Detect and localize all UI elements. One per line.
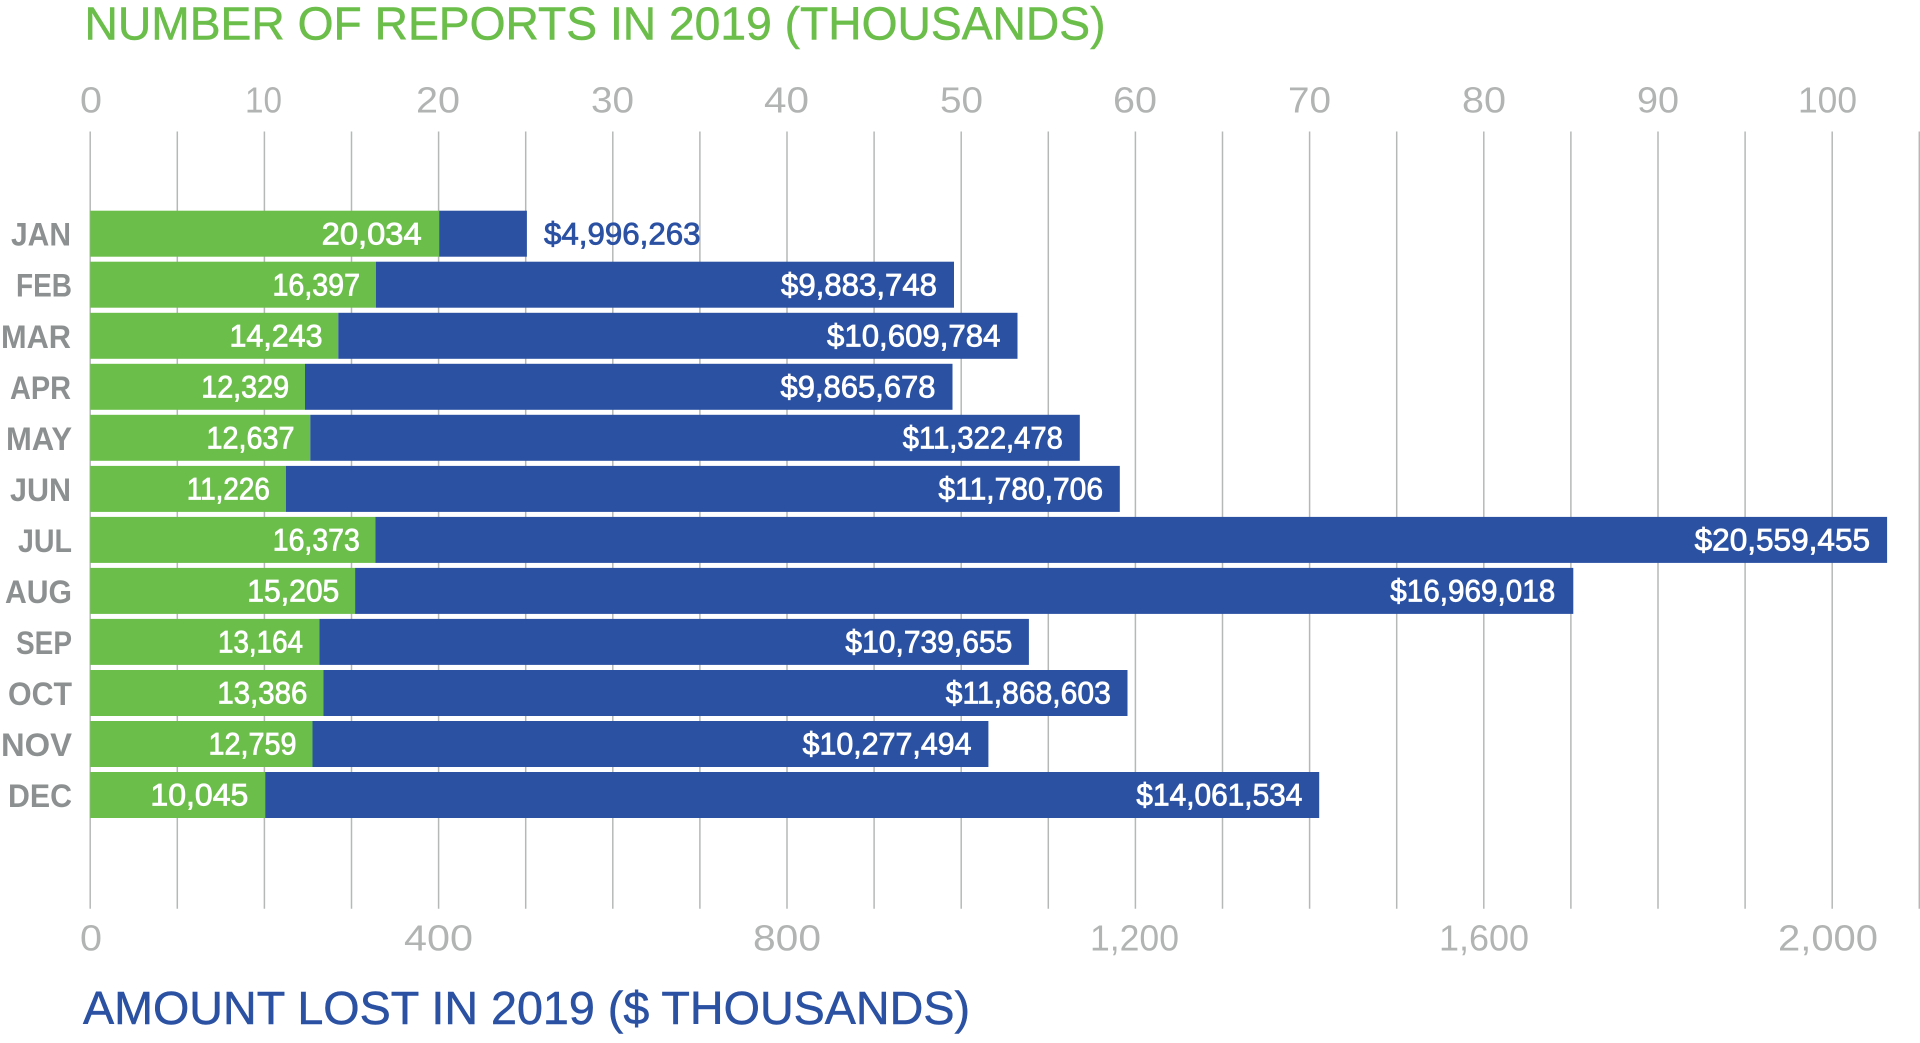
amount value: $20,559,455 (1695, 522, 1870, 558)
reports value: 16,397 (272, 266, 360, 302)
green bar (90, 364, 305, 410)
month label: SEP (16, 625, 72, 661)
row: September (16, 619, 1029, 665)
row: February (16, 262, 954, 308)
reports value: 12,637 (206, 419, 294, 455)
green bar (90, 211, 439, 257)
top axis labels: 40 (764, 80, 809, 121)
blue bar (355, 568, 1573, 614)
amount value: $9,865,678 (780, 368, 936, 404)
reports value: 11,226 (187, 470, 270, 506)
green bar (90, 517, 375, 563)
reports value: 13,386 (217, 675, 307, 711)
green bar (90, 670, 323, 716)
blue bar (320, 619, 1029, 665)
reports value: 12,329 (201, 368, 289, 404)
bottom axis labels (80, 918, 1878, 959)
month label: JAN (11, 217, 71, 253)
row: August (5, 568, 1573, 614)
amount value: $4,996,263 (544, 215, 700, 251)
blue bar (376, 262, 954, 308)
bottom axis labels: 1,600 (1439, 918, 1529, 959)
row: April (10, 364, 952, 410)
row: October (8, 670, 1128, 716)
row: March (1, 313, 1018, 359)
top axis labels: 90 (1637, 80, 1679, 121)
top axis labels: 30 (591, 80, 634, 121)
top axis labels: 60 (1113, 80, 1157, 121)
blue bar (323, 670, 1127, 716)
blue bar (286, 466, 1120, 512)
reports value: 14,243 (230, 317, 322, 353)
blue bar (305, 364, 952, 410)
blue bar (312, 721, 988, 767)
blue bar (439, 211, 527, 257)
blue bar (375, 517, 1887, 563)
amount value: $14,061,534 (1136, 777, 1302, 813)
month label: FEB (16, 268, 72, 304)
row: May (6, 415, 1080, 461)
row: June (10, 466, 1120, 512)
bottom axis labels: 0 (80, 918, 102, 959)
amount value: $11,868,603 (946, 675, 1111, 711)
bottom axis labels: 2,000 (1778, 918, 1878, 959)
amount value: $11,322,478 (903, 419, 1063, 455)
green bar (90, 619, 320, 665)
row: November (1, 721, 988, 767)
green bar (90, 721, 312, 767)
green bar (90, 568, 355, 614)
reports value: 12,759 (208, 726, 296, 762)
top axis labels: 70 (1288, 80, 1331, 121)
green bar (90, 415, 310, 461)
amount value: $11,780,706 (938, 470, 1103, 506)
amount value: $16,969,018 (1390, 572, 1555, 608)
green bar (90, 262, 376, 308)
amount value: $10,609,784 (827, 317, 1000, 353)
month label: JUN (10, 472, 71, 508)
reports value: 20,034 (322, 215, 422, 251)
blue bar (338, 313, 1018, 359)
row: July (18, 517, 1887, 563)
blue bar (310, 415, 1080, 461)
month label: MAR (1, 319, 71, 355)
reports value: 13,164 (218, 624, 303, 660)
bottom axis labels: 800 (753, 918, 821, 959)
month label: APR (10, 370, 71, 406)
month label: JUL (18, 523, 72, 559)
top axis labels: 10 (245, 80, 282, 121)
top axis labels: 50 (940, 80, 983, 121)
green bar (90, 772, 265, 818)
blue bar (265, 772, 1319, 818)
month label: OCT (8, 676, 72, 712)
top axis labels: 20 (416, 80, 460, 121)
title: amount lost: AMOUNT LOST IN 2019 ($ THOUSANDS) (83, 982, 970, 1034)
month label: MAY (6, 421, 72, 457)
row: December (8, 772, 1319, 818)
bottom axis labels: 1,200 (1090, 918, 1179, 959)
reports value: 16,373 (273, 522, 360, 558)
month label: AUG (5, 574, 72, 610)
green bar (90, 313, 338, 359)
green bar (90, 466, 286, 512)
reports value: 10,045 (150, 777, 248, 813)
amount value: $10,739,655 (845, 624, 1012, 660)
month label: NOV (1, 727, 73, 763)
amount value: $10,277,494 (803, 726, 972, 762)
top axis labels: 100 (1798, 80, 1857, 121)
top axis labels (80, 80, 1857, 121)
top axis labels: 0 (80, 80, 102, 121)
bottom axis labels: 400 (404, 918, 473, 959)
row: January (11, 211, 700, 257)
top axis labels: 80 (1462, 80, 1506, 121)
month label: DEC (8, 778, 72, 814)
reports value: 15,205 (247, 572, 339, 608)
amount value: $9,883,748 (781, 266, 937, 302)
